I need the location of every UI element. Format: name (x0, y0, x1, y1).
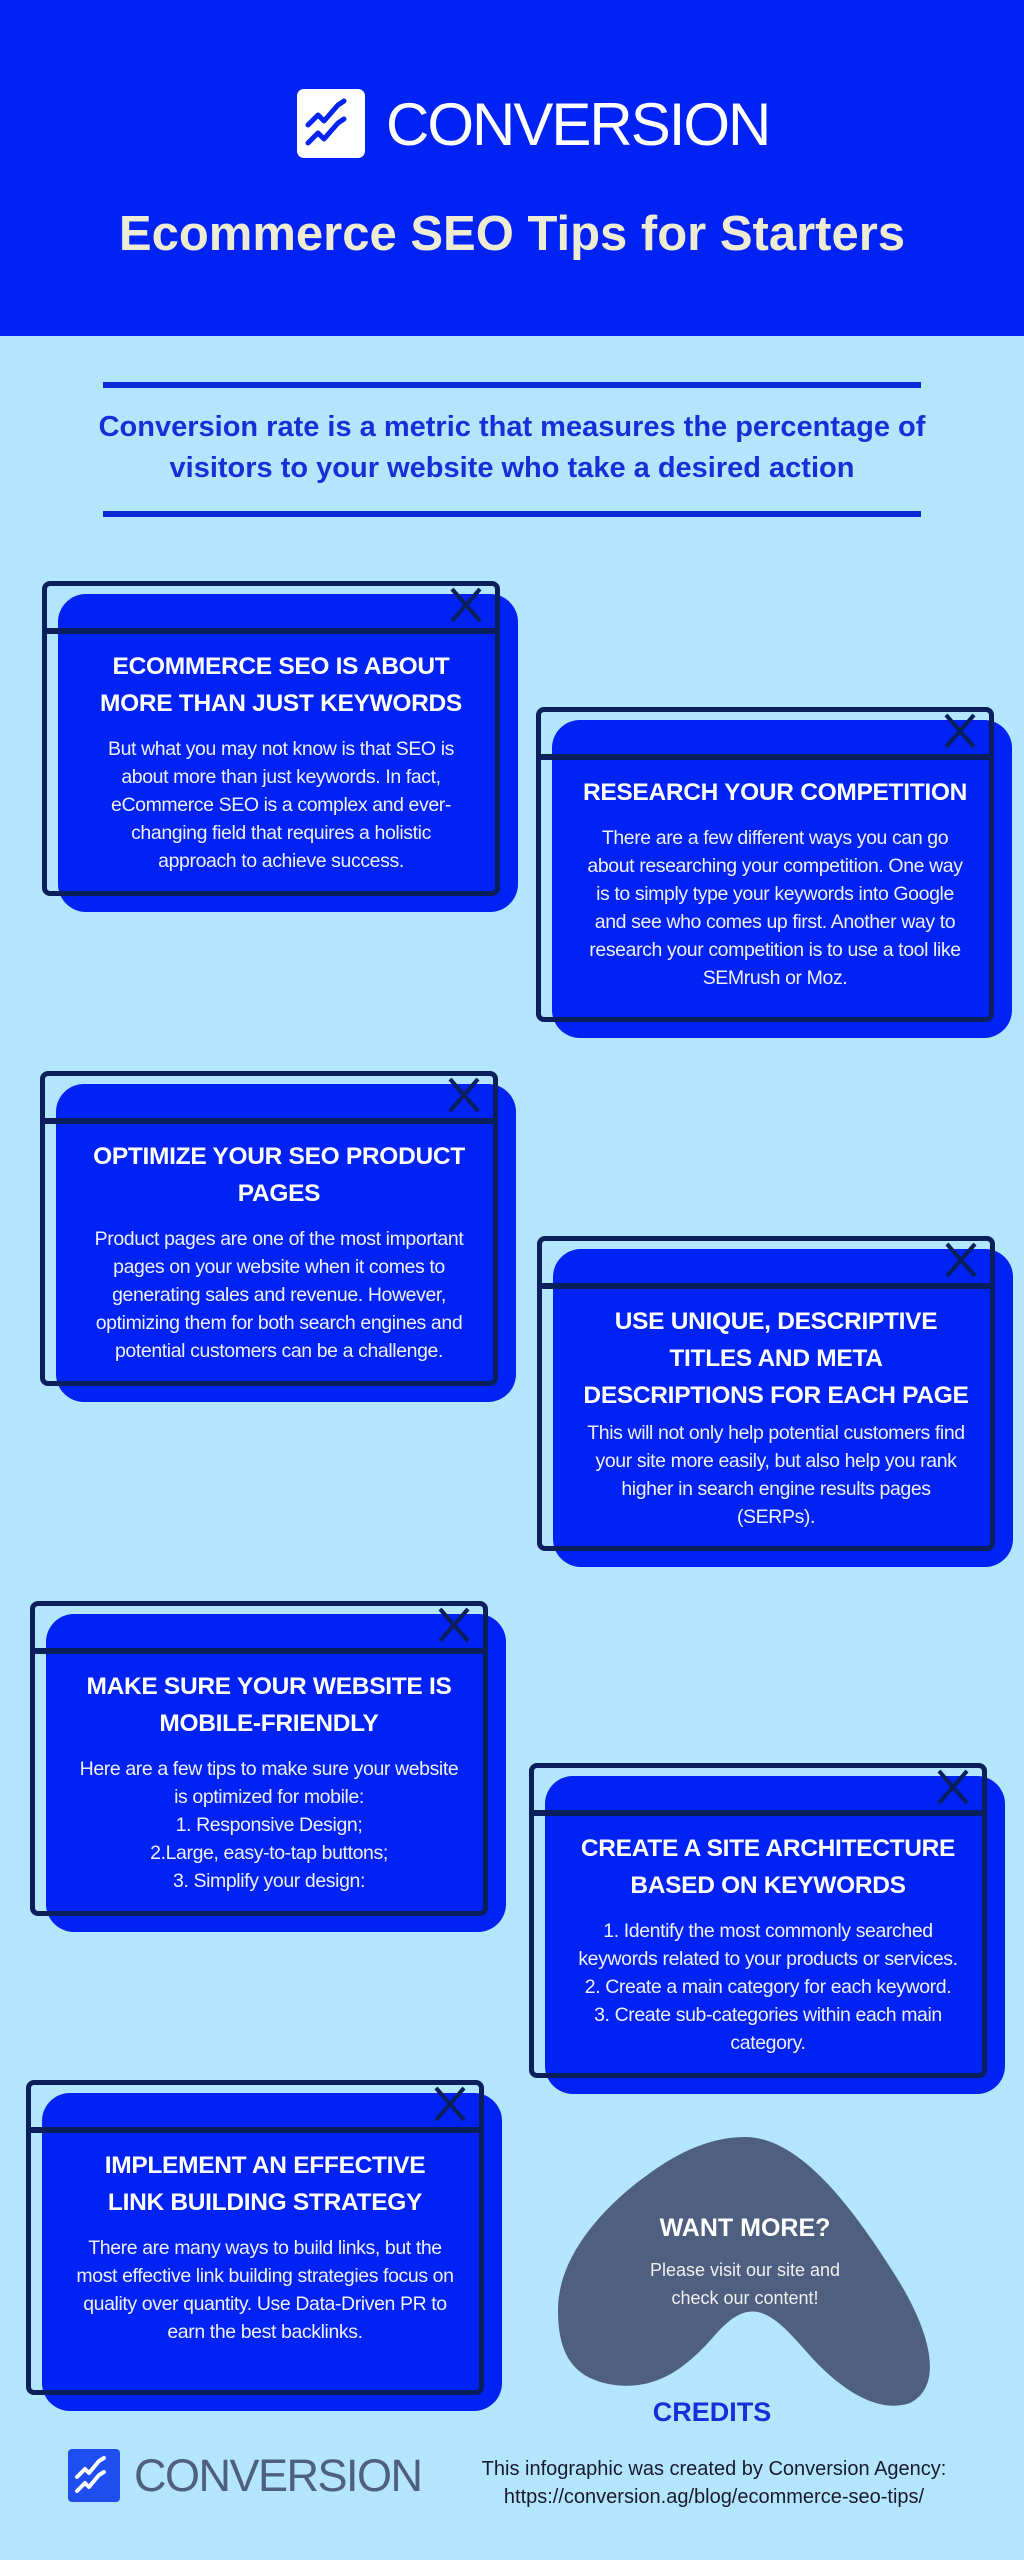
text block (578, 1835, 958, 2054)
text block (93, 1143, 465, 1362)
callout text (650, 2260, 840, 2308)
text block: OPTIMIZE YOUR SEO PRODUCT (93, 1143, 465, 1170)
text block: is optimized for mobile: (174, 1786, 364, 1808)
text block: There are a few different ways you can go (602, 827, 948, 849)
panel: link building (26, 2080, 502, 2411)
callout text: check our content! (671, 2288, 819, 2308)
text block: USE UNIQUE, DESCRIPTIVE (615, 1308, 937, 1335)
text block: RESEARCH YOUR COMPETITION (583, 779, 967, 806)
intro divider lines and text (99, 382, 926, 517)
text block: ECOMMERCE SEO IS ABOUT (113, 653, 449, 680)
text block: 2.Large, easy-to-tap buttons; (150, 1842, 388, 1864)
logo text: CONVERSION (386, 91, 769, 158)
text block: eCommerce SEO is a complex and ever- (111, 794, 451, 816)
text block: LINK BUILDING STRATEGY (108, 2189, 422, 2216)
text block: 1. Identify the most commonly searched (603, 1920, 933, 1942)
title: Ecommerce SEO Tips for Starters (119, 207, 905, 261)
text block: category. (730, 2032, 806, 2054)
header band (0, 0, 1024, 336)
credits heading: CREDITS (653, 2397, 771, 2427)
callout text: Please visit our site and (650, 2260, 840, 2280)
text block: Here are a few tips to make sure your website (80, 1758, 458, 1780)
icon: close x (434, 2086, 466, 2122)
intro text: visitors to your website who take a desired action (170, 452, 854, 484)
text block: MAKE SURE YOUR WEBSITE IS (86, 1673, 452, 1700)
text block: MOBILE-FRIENDLY (159, 1710, 379, 1737)
text block: 1. Responsive Design; (176, 1814, 362, 1836)
panel: research competition (536, 707, 1012, 1038)
icon: close x (438, 1608, 470, 1642)
icon: logo chart (297, 89, 365, 158)
text block (100, 653, 462, 872)
text block: quality over quantity. Use Data-Driven PR to (83, 2293, 447, 2315)
panel: optimize product pages (40, 1071, 516, 1402)
text block: keywords related to your products or services. (578, 1948, 958, 1970)
text block: approach to achieve success. (158, 850, 404, 872)
text block: research your competition is to use a tool like (589, 939, 961, 961)
text block (583, 779, 967, 989)
text block: IMPLEMENT AN EFFECTIVE (105, 2152, 425, 2179)
text block: SEMrush or Moz. (703, 967, 847, 989)
text block: about more than just keywords. In fact, (121, 766, 441, 788)
text block: about researching your competition. One way (587, 855, 963, 877)
text block: is to simply type your keywords into Google (596, 883, 954, 905)
icon: footer logo (68, 2449, 120, 2502)
intro text (99, 411, 926, 484)
callout heading: WANT MORE? (660, 2214, 830, 2242)
text block: MORE THAN JUST KEYWORDS (100, 690, 462, 717)
credits text: https://conversion.ag/blog/ecommerce-seo-tips/ (504, 2486, 924, 2508)
text block: 3. Create sub-categories within each main (594, 2004, 942, 2026)
text block: This will not only help potential customers find (587, 1422, 965, 1444)
text block: most effective link building strategies focus on (76, 2265, 454, 2287)
panel: mobile friendly (30, 1601, 506, 1932)
text block (583, 1308, 969, 1528)
icon: close x (946, 1242, 976, 1278)
text block: optimizing them for both search engines and (96, 1312, 462, 1334)
panel: site architecture (529, 1763, 1005, 2094)
text block: 3. Simplify your design: (173, 1870, 365, 1892)
footer logo (68, 2449, 422, 2502)
text block: BASED ON KEYWORDS (630, 1872, 906, 1899)
text block: Product pages are one of the most important (95, 1228, 463, 1250)
text block: But what you may not know is that SEO is (108, 738, 454, 760)
credits text (482, 2458, 946, 2508)
text block: There are many ways to build links, but the (88, 2237, 442, 2259)
panel: unique titles (537, 1236, 1013, 1567)
icon: close x (450, 588, 482, 622)
icon: close x (938, 1770, 968, 1804)
icon: close x (944, 714, 976, 748)
text block: and see who comes up first. Another way to (595, 911, 955, 933)
credits text: This infographic was created by Conversion Agency: (482, 2458, 946, 2480)
panel: ecommerce seo (42, 581, 518, 912)
text block: potential customers can be a challenge. (115, 1340, 443, 1362)
icon: close x (448, 1078, 480, 1112)
text block: TITLES AND META (669, 1345, 883, 1372)
text block: generating sales and revenue. However, (112, 1284, 446, 1306)
text block: earn the best backlinks. (167, 2321, 363, 2343)
text block: DESCRIPTIONS FOR EACH PAGE (583, 1382, 969, 1409)
text block: pages on your website when it comes to (113, 1256, 445, 1278)
text block: (SERPs). (737, 1506, 815, 1528)
text block: PAGES (238, 1180, 320, 1207)
text block: CREATE A SITE ARCHITECTURE (581, 1835, 955, 1862)
footer logo text: CONVERSION (134, 2450, 422, 2501)
text block (76, 2152, 454, 2343)
text block: 2. Create a main category for each keyword. (585, 1976, 951, 1998)
callout: want more blob (558, 2137, 930, 2406)
text block (80, 1673, 458, 1892)
text block: changing field that requires a holistic (131, 822, 431, 844)
logo (297, 89, 769, 158)
text block: your site more easily, but also help you rank (596, 1450, 956, 1472)
text block: higher in search engine results pages (621, 1478, 931, 1500)
intro text: Conversion rate is a metric that measures the percentage of (99, 411, 925, 443)
